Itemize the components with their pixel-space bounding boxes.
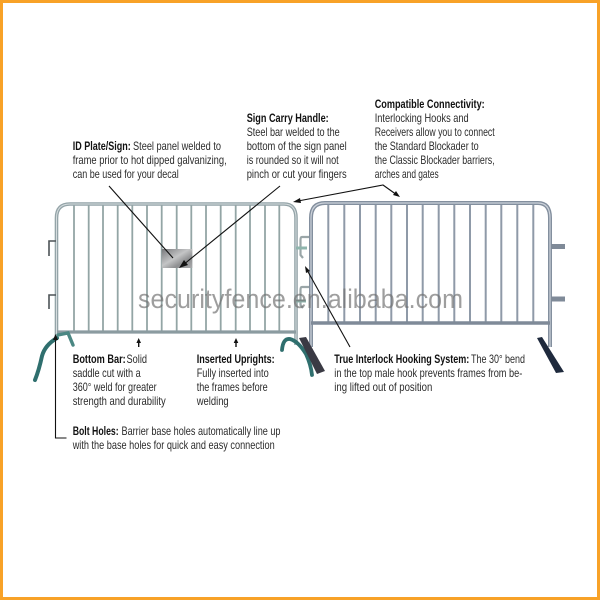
text: ID Plate/Sign: Steel panel welded to bbox=[133, 139, 221, 153]
text: ID Plate/Sign: frame prior to hot dipped galvanizing, bbox=[73, 153, 227, 167]
text: True Interlock Hooking System bbox=[334, 352, 525, 394]
text: Compatible Connectivity: Compatible Connectivity: bbox=[375, 97, 485, 111]
right barrier frame bbox=[311, 203, 550, 347]
text: Compatible Connectivity bbox=[375, 97, 495, 181]
text: True Interlock Hooking System: True Interlock Hooking System: bbox=[334, 352, 469, 366]
text: Bottom Bar: 360° weld for greater bbox=[73, 380, 157, 394]
text: Compatible Connectivity: Interlocking Hooks and bbox=[375, 111, 469, 125]
arrow: bottom bar bbox=[136, 338, 141, 347]
text: Bolt Holes bbox=[72, 424, 281, 452]
watermark: securityfence.en.alibaba.com bbox=[138, 284, 463, 314]
text: Sign Carry Handle: is rounded so it will not bbox=[247, 153, 339, 167]
text: Compatible Connectivity: the Standard Blockader to bbox=[375, 139, 479, 153]
text: Inserted Uprights: Inserted Uprights: bbox=[197, 352, 275, 366]
text: ID Plate/Sign: can be used for your decal bbox=[73, 167, 179, 181]
text: Bottom Bar bbox=[73, 352, 166, 408]
text: Bottom Bar: Bottom Bar: bbox=[73, 352, 126, 366]
arrow: sign carry handle bbox=[179, 186, 280, 268]
left foot of right barrier bbox=[299, 337, 325, 374]
text: Sign Carry Handle: pinch or cut your fingers bbox=[247, 167, 347, 181]
right barrier bbox=[299, 203, 565, 374]
left barrier uprights bbox=[74, 205, 279, 332]
text: True Interlock Hooking System: The 30° bend bbox=[471, 352, 525, 366]
text: Compatible Connectivity: the Classic Blockader barriers, bbox=[375, 153, 495, 167]
arrow: true interlock bbox=[305, 266, 350, 347]
text: True Interlock Hooking System: ing lifted out of position bbox=[334, 380, 432, 394]
left barrier sign plate bbox=[162, 249, 192, 268]
arrow: inserted uprights bbox=[234, 338, 238, 347]
text: Bolt Holes: Barrier base holes automatically line up bbox=[122, 424, 281, 438]
text: Compatible Connectivity: Receivers allow you to connect bbox=[375, 125, 495, 139]
text: Inserted Uprights: the frames before bbox=[197, 380, 268, 394]
left barrier frame bbox=[56, 204, 296, 345]
text: Bolt Holes: Bolt Holes: bbox=[73, 424, 119, 438]
text: Inserted Uprights: Fully inserted into bbox=[197, 366, 269, 380]
text: Sign Carry Handle: Steel bar welded to the bbox=[247, 125, 340, 139]
text: Bottom Bar: strength and durability bbox=[73, 394, 166, 408]
right barrier foot bbox=[537, 337, 564, 373]
left barrier bbox=[35, 204, 312, 380]
text: Bottom Bar: Solid bbox=[126, 352, 147, 366]
text: Compatible Connectivity: arches and gates bbox=[375, 167, 439, 181]
text: True Interlock Hooking System: in the top male hook prevents frames from be- bbox=[334, 366, 522, 380]
left barrier receivers bbox=[49, 241, 56, 309]
right end hooks bbox=[296, 237, 310, 308]
right barrier stubs bbox=[551, 246, 565, 299]
text: Inserted Uprights: welding bbox=[196, 394, 229, 408]
right barrier uprights bbox=[328, 204, 533, 323]
text: ID Plate/Sign bbox=[73, 139, 227, 181]
text: Sign Carry Handle: Sign Carry Handle: bbox=[247, 111, 329, 125]
arrow: bolt holes bbox=[53, 334, 66, 438]
text: Bolt Holes: with the base holes for quick and easy connection bbox=[72, 438, 275, 452]
arrow: ID plate bbox=[109, 186, 173, 258]
text: Sign Carry Handle bbox=[247, 111, 347, 181]
text: Inserted Uprights bbox=[196, 352, 275, 408]
text: Bottom Bar: saddle cut with a bbox=[73, 366, 141, 380]
left barrier feet bbox=[35, 333, 312, 380]
arrow: compatible connectivity bbox=[293, 185, 400, 203]
text: ID Plate/Sign: ID Plate/Sign: bbox=[73, 139, 131, 153]
text: Sign Carry Handle: bottom of the sign panel bbox=[247, 139, 347, 153]
